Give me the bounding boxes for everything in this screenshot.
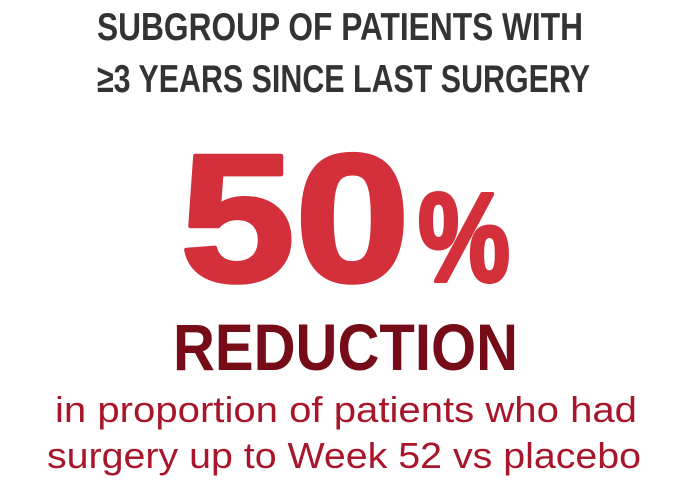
description text [47, 389, 641, 476]
big stat: 50%: % [418, 167, 510, 308]
title: SUBGROUP OF PATIENTS WITH [97, 6, 583, 49]
heading: reduction: REDUCTION [173, 310, 518, 384]
big stat: 50%: 50 [180, 116, 410, 320]
description text: in proportion of patients who had [55, 389, 637, 430]
title [97, 6, 590, 101]
description text: surgery up to Week 52 vs placebo [47, 435, 641, 476]
big stat: 50% [180, 116, 510, 320]
